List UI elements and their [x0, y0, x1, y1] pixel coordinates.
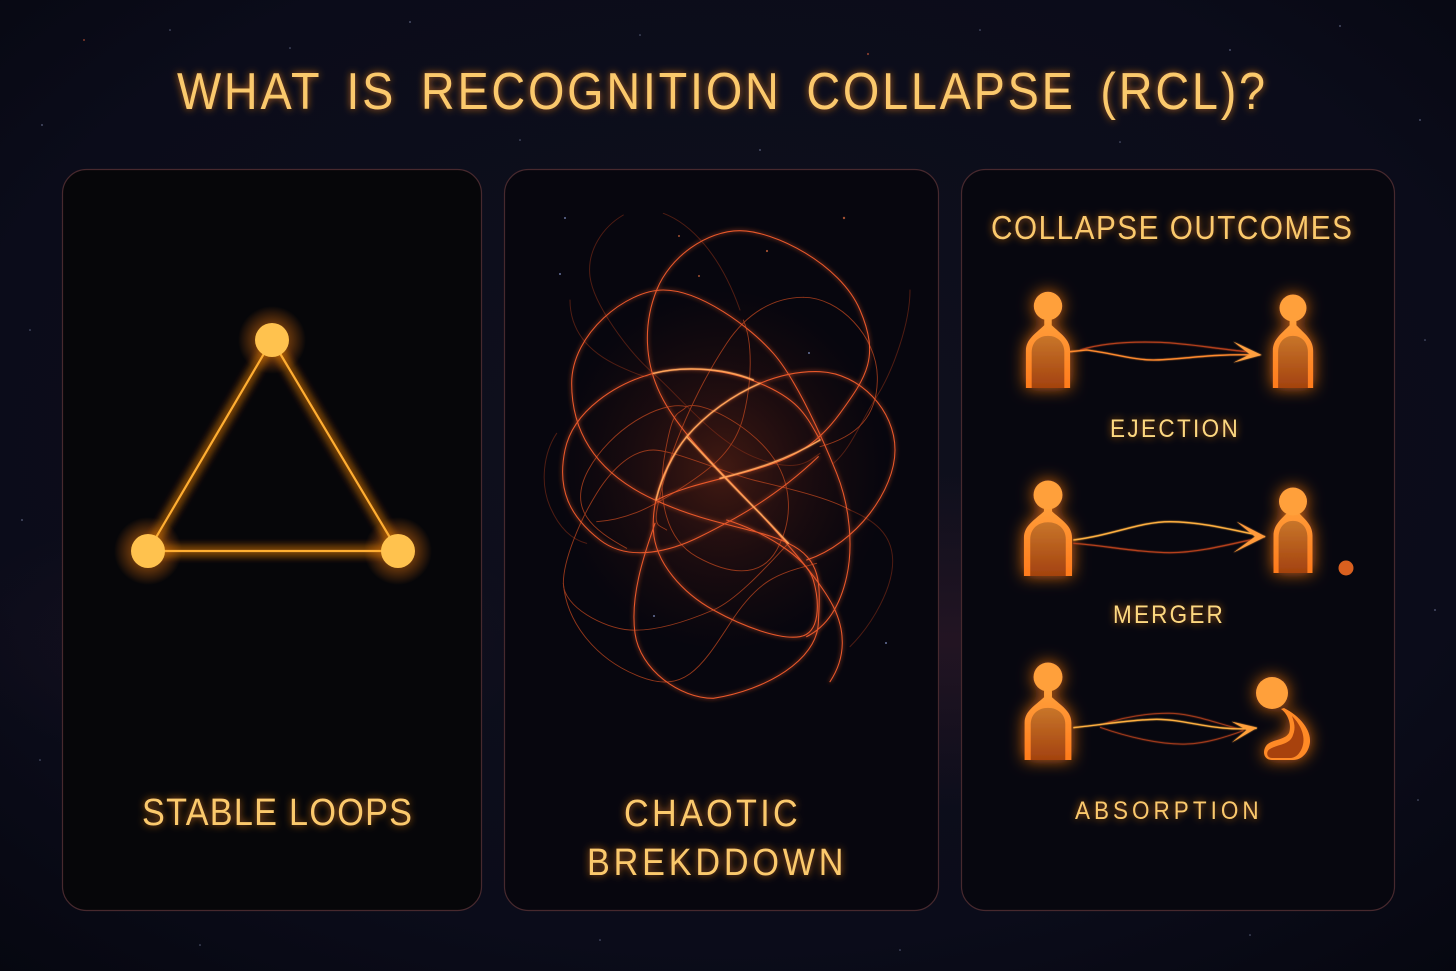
source figure	[1025, 662, 1071, 760]
outcome: absorption	[1025, 662, 1310, 825]
outcome: merger	[1024, 480, 1354, 629]
panel card	[62, 170, 482, 910]
label: chaotic breakdown: CHAOTIC	[624, 791, 798, 834]
residual dot	[1338, 560, 1354, 576]
label: stable loops: STABLE LOOPS	[142, 790, 412, 833]
label: chaotic breakdown: BREKDDOWN	[587, 840, 844, 883]
source figure	[1024, 480, 1072, 576]
panel card	[504, 170, 938, 910]
target figure	[1273, 294, 1313, 388]
panel heading: COLLAPSE OUTCOMES	[991, 210, 1352, 246]
outcome: ejection	[1026, 292, 1313, 443]
label: chaotic breakdown	[587, 791, 844, 883]
arrow	[1070, 342, 1262, 363]
absorbed figure	[1256, 677, 1310, 760]
panel: chaotic breakdown	[504, 170, 938, 910]
tangled orbit lines	[544, 213, 910, 698]
source figure	[1026, 292, 1070, 388]
label: EJECTION	[1110, 415, 1238, 443]
label: ABSORPTION	[1075, 797, 1259, 825]
arrow	[1073, 522, 1266, 553]
arrow	[1073, 713, 1257, 744]
panel card	[962, 170, 1394, 910]
label: MERGER	[1113, 601, 1223, 629]
panel: stable loops	[62, 170, 482, 910]
panel: collapse outcomes	[962, 170, 1394, 910]
triangle loop diagram	[114, 306, 432, 585]
target figure	[1274, 488, 1312, 573]
title: WHAT IS RECOGNITION COLLAPSE (RCL)?	[177, 63, 1265, 121]
